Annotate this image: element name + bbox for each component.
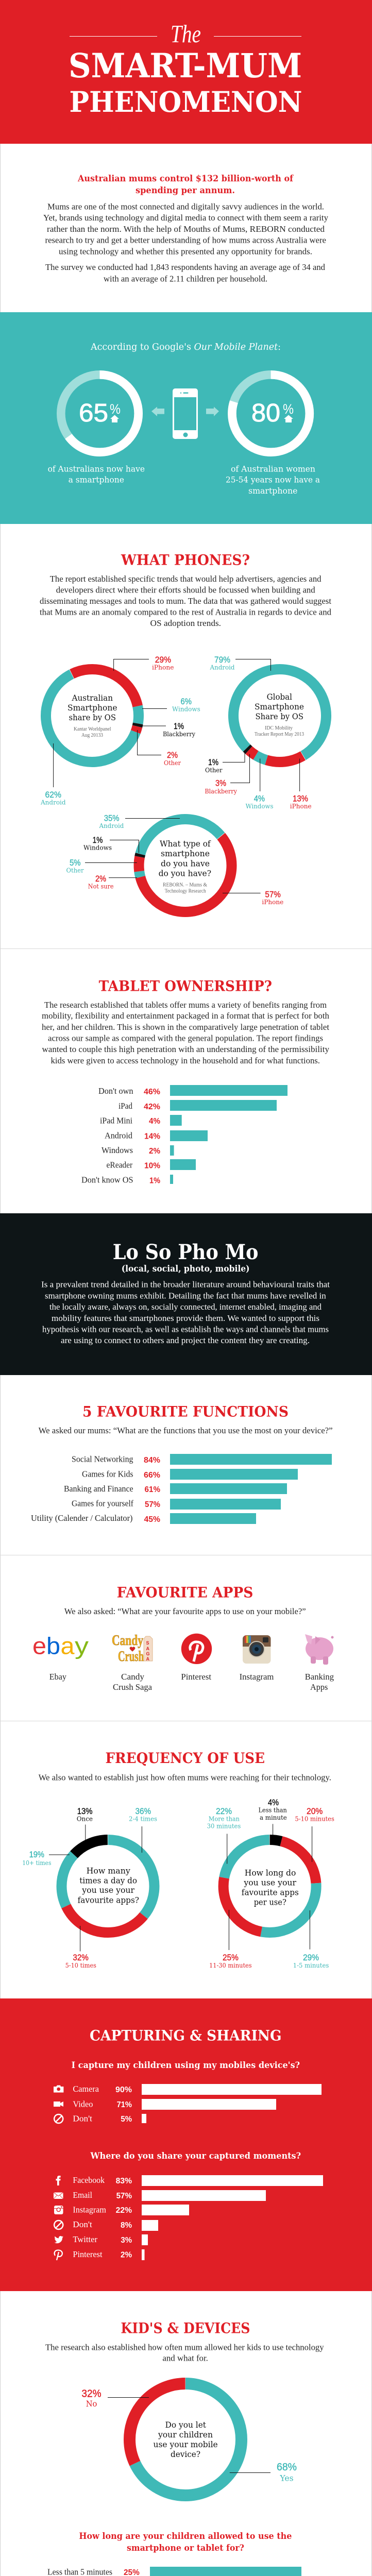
bar chart: capture: Camera xyxy=(73,2084,99,2094)
chart: what type of smartphone: Other xyxy=(66,867,84,874)
chart: what type of smartphone: smartphone xyxy=(161,849,210,858)
bar chart: tablet ownership xyxy=(81,1085,288,1185)
panel: favourite apps xyxy=(0,1555,372,1721)
chart: times a day: 13% xyxy=(77,1807,93,1816)
text block xyxy=(41,1280,330,1345)
bar chart: functions: Games for Kids xyxy=(82,1469,133,1479)
donut: 80 percent: % xyxy=(283,401,294,417)
chart: how long per use: 20% xyxy=(307,1807,323,1816)
bar chart: tablet ownership: 2% xyxy=(149,1147,160,1156)
bar chart: share: 8% xyxy=(121,2221,132,2230)
chart: global smartphone share: Share by OS xyxy=(256,712,303,721)
subheading: how long allowed: How long are your children allowed to use the xyxy=(79,2531,292,2541)
chart: global smartphone share: iPhone xyxy=(290,802,312,810)
bar chart: share: Instagram xyxy=(73,2205,106,2214)
subheading: how long allowed: smartphone or tablet for? xyxy=(127,2543,244,2553)
intro headline xyxy=(77,174,294,196)
caption: Australian women: smartphone xyxy=(248,486,298,496)
app: candy crush saga: A xyxy=(146,1656,149,1662)
bar chart: functions: Banking and Finance xyxy=(64,1484,133,1494)
chart: let children use device: use your mobile xyxy=(154,2440,218,2449)
text block: the locally aware, always on, socially connected, internet enabled, imaging and xyxy=(49,1302,322,1312)
chart: let children use device: Do you let xyxy=(165,2420,207,2430)
chart: global smartphone share: 4% xyxy=(254,794,265,804)
bar chart: tablet ownership: Android xyxy=(105,1130,132,1141)
question text: We asked our mums: “What are the functions that you use the most on your device?” xyxy=(39,1426,333,1435)
chart: what type of smartphone: do you have? xyxy=(159,869,211,878)
text block: smartphone owning mums exhibit. Detailing the fact that mums have revelled in xyxy=(45,1291,326,1300)
chart: let children use device: 32% xyxy=(81,2388,102,2399)
app: ebay: Ebay xyxy=(49,1672,66,1682)
chart: how long per use: 4% xyxy=(268,1798,279,1807)
intro text xyxy=(43,201,328,283)
bar chart: tablet ownership: Windows xyxy=(102,1145,133,1155)
bar chart: tablet ownership: 46% xyxy=(144,1088,160,1096)
text block: The report established specific trends that would help advertisers, agencies and xyxy=(50,574,322,584)
heading: 5 FAVOURITE FUNCTIONS xyxy=(82,1403,289,1420)
chart: what type of smartphone: Not sure xyxy=(88,883,114,890)
bar chart: tablet ownership: 1% xyxy=(149,1177,160,1185)
bar chart: functions: 57% xyxy=(145,1500,160,1509)
chart: what type of smartphone: 35% xyxy=(104,814,120,823)
bar chart: tablet ownership: 10% xyxy=(144,1161,160,1171)
text block: The research also established how often mum allowed her kids to use technology xyxy=(45,2343,324,2352)
heading: FREQUENCY OF USE xyxy=(105,1750,265,1767)
chart: global smartphone share: 3% xyxy=(215,779,226,788)
chart: global smartphone share xyxy=(205,652,343,810)
chart: what type of smartphone xyxy=(66,800,283,931)
chart: global smartphone share: Tracker Report May 2013 xyxy=(255,732,304,737)
donut: 65 percent: % xyxy=(110,401,121,417)
chart: Australian smartphone share: 1% xyxy=(174,722,184,731)
text block: developers direct where their efforts should be focussed when building and xyxy=(56,585,315,595)
app: candy crush saga: S xyxy=(146,1640,149,1646)
intro text: rather than the norm. With the help of Mouths of Mums, REBORN conducted xyxy=(47,224,325,234)
text block xyxy=(45,2343,324,2363)
text block: Is a prevalent trend detailed in the broader literature around behavioural traits that xyxy=(41,1280,330,1290)
text block: wanted to couple this high penetration with an understanding of the permissibility xyxy=(42,1044,329,1054)
bar chart: capture xyxy=(54,2084,322,2124)
bar chart: capture: Video xyxy=(73,2099,93,2109)
heading: CAPTURING & SHARING xyxy=(90,2027,282,2044)
text block: The research established that tablets offer mums a variety of benefits ranging from xyxy=(44,1000,327,1010)
intro text: using technology and whether this presented any opportunity for brands. xyxy=(59,247,312,257)
intro text: Mums are one of the most connected and digitally savvy audiences in the world. xyxy=(47,201,324,211)
chart: let children use device: 68% xyxy=(277,2462,297,2473)
chart: times a day: 5-10 times xyxy=(65,1961,96,1969)
bar chart: functions: Games for yourself xyxy=(72,1498,133,1509)
bar chart: functions: 66% xyxy=(144,1471,160,1480)
bar chart: tablet ownership: Don't own xyxy=(98,1086,133,1096)
text block: hypothesis with our research, as well as establish the ways and channels that mums xyxy=(42,1325,329,1334)
bar chart: functions: 84% xyxy=(144,1456,160,1465)
chart: times a day: favourite apps? xyxy=(78,1895,139,1905)
icon: facebook xyxy=(56,2176,61,2185)
chart: times a day: 19% xyxy=(29,1850,44,1859)
bar chart: functions: 61% xyxy=(144,1485,160,1494)
intro headline: Australian mums control $132 billion-worth of xyxy=(77,174,294,184)
text block: her, and her children. This is shown in the comparatively large penetration of tablet xyxy=(42,1022,329,1032)
bar chart: tablet ownership: 14% xyxy=(144,1132,160,1141)
app: ebay xyxy=(32,1632,89,1682)
icon: email xyxy=(54,2193,63,2199)
chart: what type of smartphone: REBORN. – Mums & xyxy=(163,882,207,888)
panel: capturing and sharing xyxy=(0,1998,372,2291)
heading: FAVOURITE APPS xyxy=(117,1584,253,1601)
title: The xyxy=(171,20,201,48)
text block: OS adoption trends. xyxy=(150,618,221,628)
icon: smartphone xyxy=(173,388,198,439)
bar chart: functions: 45% xyxy=(144,1515,160,1524)
chart: how long per use: 5-10 minutes xyxy=(295,1815,334,1823)
chart: let children use device xyxy=(81,2383,297,2496)
panel: kids and devices xyxy=(1,2291,371,2576)
app: candy crush saga: A xyxy=(146,1646,149,1651)
chart: Australian smartphone share: Smartphone xyxy=(67,703,117,713)
chart: let children use device: device? xyxy=(171,2450,200,2459)
chart: what type of smartphone: 2% xyxy=(95,874,106,884)
intro text: Yet, brands using technology and digital media to connect with them seem a rarity xyxy=(43,213,328,223)
text block: disseminating messages and tools to mum. The data that was gathered would suggest xyxy=(40,596,331,606)
caption: Australians: of Australians now have xyxy=(48,465,145,474)
chart: global smartphone share: IDC Mobility xyxy=(265,725,293,731)
chart: times a day: you use your xyxy=(81,1886,135,1895)
heading: KID'S & DEVICES xyxy=(121,2319,250,2336)
title: PHENOMENON xyxy=(69,85,302,118)
bar chart: capture: 5% xyxy=(121,2115,132,2124)
panel heading: According to Google's Our Mobile Planet: xyxy=(90,342,281,352)
bar chart: share: Email xyxy=(73,2190,92,2200)
bar chart: share: 57% xyxy=(116,2192,132,2200)
chart: Australian smartphone share: Blackberry xyxy=(163,730,196,738)
caption: Australians xyxy=(48,465,145,485)
chart: Australian smartphone share: Android xyxy=(40,799,66,806)
icon: arrow right xyxy=(206,407,219,416)
donut: 65 percent: 65 xyxy=(79,399,108,427)
subheading: how long allowed xyxy=(79,2531,292,2553)
icon: twitter xyxy=(54,2236,63,2243)
caption: Australian women: of Australian women xyxy=(231,465,315,474)
chart: global smartphone share: 79% xyxy=(214,655,230,665)
panel: tablet ownership xyxy=(0,948,372,1213)
text block: mobility, flexibility and entertainment packaged in a format that is perfect for both xyxy=(42,1011,329,1021)
title xyxy=(69,20,302,118)
caption: Australians: a smartphone xyxy=(69,476,124,485)
chart: global smartphone share: 1% xyxy=(208,758,218,767)
heading: TABLET OWNERSHIP? xyxy=(99,978,272,995)
chart: times a day: 36% xyxy=(135,1807,151,1816)
chart: how long per use: 25% xyxy=(223,1953,239,1962)
caption: Australian women: 25-54 years now have a xyxy=(226,476,320,485)
bar chart: share: 3% xyxy=(121,2236,132,2245)
chart: times a day: 32% xyxy=(73,1953,89,1962)
app: instagram: Instagram xyxy=(240,1672,274,1682)
text block xyxy=(40,574,331,628)
icon: pinterest xyxy=(55,2250,62,2260)
panel: 5 favourite functions xyxy=(1,1375,371,1555)
chart: global smartphone share: Blackberry xyxy=(205,787,238,795)
chart: what type of smartphone: do you have xyxy=(161,859,210,868)
chart: how long per use: 22% xyxy=(216,1807,232,1816)
panel: Lo So Pho Mo xyxy=(0,1213,372,1375)
app: banking piggy bank: Banking xyxy=(305,1672,334,1682)
chart: how long per use: 29% xyxy=(303,1953,319,1962)
bar chart: capture: Don't xyxy=(73,2113,92,2123)
chart: global smartphone share: Other xyxy=(205,766,223,774)
caption: Australian women xyxy=(226,465,320,496)
donut: 80 percent xyxy=(232,375,310,452)
bar chart: share: Don't xyxy=(73,2219,92,2229)
panel: our mobile planet xyxy=(0,312,372,524)
subheading: capture: I capture my children using my mobiles device's? xyxy=(72,2060,300,2071)
app: candy crush saga: Crush xyxy=(118,1648,144,1665)
app: banking piggy bank xyxy=(305,1634,334,1692)
app: ebay: a xyxy=(61,1632,75,1659)
chart: Australian smartphone share: Australian xyxy=(72,693,113,703)
bar chart: share xyxy=(54,2175,323,2260)
panel: what phones xyxy=(1,524,371,948)
app: banking piggy bank: Apps xyxy=(310,1682,328,1692)
bar chart: tablet ownership: 4% xyxy=(149,1117,160,1126)
icon: none xyxy=(54,2221,63,2229)
app: candy crush saga xyxy=(112,1632,153,1692)
subheading: (local, social, photo, mobile) xyxy=(122,1264,249,1274)
app: candy crush saga: Candy xyxy=(112,1632,143,1649)
text block: mobility features that smartphones provide them. We wanted to support this xyxy=(52,1313,319,1323)
text block: are using to connect to others and project the content they are creating. xyxy=(61,1335,310,1345)
text block: kids were given to access technology in the household and for what functions. xyxy=(50,1056,320,1065)
icon: video xyxy=(54,2102,63,2107)
chart: times a day: Once xyxy=(77,1815,93,1823)
chart: Australian smartphone share: 29% xyxy=(155,655,171,665)
intro text: research to try and get a better understanding of how mums across Australia were xyxy=(45,235,326,245)
icon: camera xyxy=(54,2086,63,2093)
chart: times a day: 10+ times xyxy=(22,1859,52,1867)
chart: Australian smartphone share: iPhone xyxy=(152,664,174,671)
app: instagram xyxy=(240,1635,274,1682)
chart: times a day: How many xyxy=(87,1866,130,1875)
chart: times a day: 2-4 times xyxy=(129,1815,157,1823)
bar chart: functions xyxy=(31,1454,332,1524)
panel: introduction xyxy=(1,144,371,312)
chart: how long per use: 1-5 minutes xyxy=(293,1961,329,1969)
chart: what type of smartphone: Windows xyxy=(83,844,112,852)
bar chart: capture: 71% xyxy=(117,2100,132,2109)
bar chart: capture: 90% xyxy=(115,2086,132,2094)
app: candy crush saga: G xyxy=(146,1651,150,1656)
chart: Australian smartphone share: Windows xyxy=(172,705,200,713)
intro headline: spending per annum. xyxy=(136,185,235,196)
app: ebay: b xyxy=(46,1632,60,1659)
chart: how long per use: a minute xyxy=(260,1814,287,1821)
text block: across our sample as compared with the general population. The report findings xyxy=(48,1033,323,1043)
text block: and what for. xyxy=(162,2353,208,2363)
chart: let children use device: Yes xyxy=(279,2473,294,2483)
chart: global smartphone share: 13% xyxy=(293,794,308,804)
chart: Australian smartphone share: 62% xyxy=(45,790,61,800)
chart: how long per use: 30 minutes xyxy=(207,1822,241,1830)
bar chart: tablet ownership: iPad xyxy=(119,1101,132,1111)
title: SMART-MUM xyxy=(69,46,302,86)
bar chart: tablet ownership: 42% xyxy=(144,1103,160,1111)
chart: Australian smartphone share: 2% xyxy=(167,751,178,760)
bar chart: functions: Social Networking xyxy=(72,1454,133,1464)
chart: times a day xyxy=(22,1807,157,1969)
chart: Australian smartphone share xyxy=(30,654,200,806)
chart: let children use device: No xyxy=(86,2399,97,2409)
icon: instagram xyxy=(54,2206,63,2214)
text block xyxy=(42,1000,329,1065)
chart: let children use device: your children xyxy=(158,2430,213,2439)
chart: how long per use: More than xyxy=(209,1815,240,1823)
app: ebay: e xyxy=(32,1632,46,1659)
subheading: share: Where do you share your captured moments? xyxy=(90,2151,301,2161)
app: pinterest xyxy=(181,1634,212,1682)
bar chart: share: 83% xyxy=(116,2177,132,2185)
icon: none xyxy=(54,2114,63,2123)
app: pinterest: Pinterest xyxy=(181,1672,211,1682)
chart: what type of smartphone: 1% xyxy=(93,836,103,845)
bar chart: tablet ownership: Don't know OS xyxy=(81,1175,133,1185)
chart: what type of smartphone: Android xyxy=(99,822,124,829)
donut: 80 percent: 80 xyxy=(251,399,280,427)
bar chart: share: Twitter xyxy=(73,2234,97,2244)
chart: what type of smartphone: What type of xyxy=(160,839,211,849)
chart: how long per use: Less than xyxy=(259,1806,287,1814)
bar chart: share: 22% xyxy=(116,2206,132,2215)
app: candy crush saga: Candy xyxy=(121,1672,145,1682)
chart: how long per use: 11-30 minutes xyxy=(209,1961,252,1969)
bar chart: functions: Utility (Calender / Calculator) xyxy=(31,1513,133,1523)
panel: frequency of use xyxy=(0,1721,372,1998)
chart: what type of smartphone: Technology Research xyxy=(165,889,206,894)
app: candy crush saga: Crush Saga xyxy=(113,1682,152,1692)
chart: global smartphone share: Windows xyxy=(246,802,273,810)
intro text: We also wanted to establish just how often mums were reaching for their technology. xyxy=(39,1772,331,1782)
chart: times a day: times a day do xyxy=(79,1876,137,1886)
bar chart: share: 2% xyxy=(121,2250,132,2260)
chart: Australian smartphone share: Aug 20133 xyxy=(81,733,103,738)
chart: how long per use xyxy=(207,1798,334,1969)
intro text: with an average of 2.11 children per household. xyxy=(104,274,267,283)
chart: global smartphone share: Global xyxy=(267,692,292,702)
chart: Australian smartphone share: Kantar Worldpanel xyxy=(74,726,111,732)
app: ebay: y xyxy=(75,1632,89,1659)
chart: how long per use: How long do xyxy=(245,1869,296,1878)
intro text: The survey we conducted had 1,843 respondents having an average age of 34 and xyxy=(45,262,325,272)
bar chart: share: Facebook xyxy=(73,2175,105,2185)
heading: WHAT PHONES? xyxy=(121,552,250,569)
donut: 65 percent xyxy=(61,375,139,452)
chart: what type of smartphone: iPhone xyxy=(262,898,283,906)
heading: Lo So Pho Mo xyxy=(113,1240,258,1264)
chart: how long per use: you use your xyxy=(243,1878,297,1888)
chart: what type of smartphone: 57% xyxy=(265,890,281,900)
chart: how long per use: favourite apps xyxy=(242,1888,299,1897)
chart: global smartphone share: Android xyxy=(210,664,235,671)
chart: what type of smartphone: 5% xyxy=(70,858,81,868)
chart: how long per use: per use? xyxy=(254,1898,286,1907)
chart: Australian smartphone share: Other xyxy=(164,759,181,767)
bar chart: tablet ownership: iPad Mini xyxy=(100,1115,132,1125)
bar chart: tablet ownership: eReader xyxy=(106,1160,133,1170)
chart: global smartphone share: Smartphone xyxy=(255,702,304,711)
text block: that Mums are an anomaly compared to the rest of Australia in regards to device and xyxy=(40,607,331,617)
bar chart: share: Pinterest xyxy=(73,2249,103,2259)
bar chart: time allowed xyxy=(39,2567,331,2576)
icon: arrow left xyxy=(151,407,164,416)
question text: We also asked: “What are your favourite apps to use on your mobile?” xyxy=(64,1606,306,1616)
panel: title header xyxy=(0,0,372,144)
chart: Australian smartphone share: 6% xyxy=(180,697,192,706)
chart: Australian smartphone share: share by OS xyxy=(69,713,116,722)
